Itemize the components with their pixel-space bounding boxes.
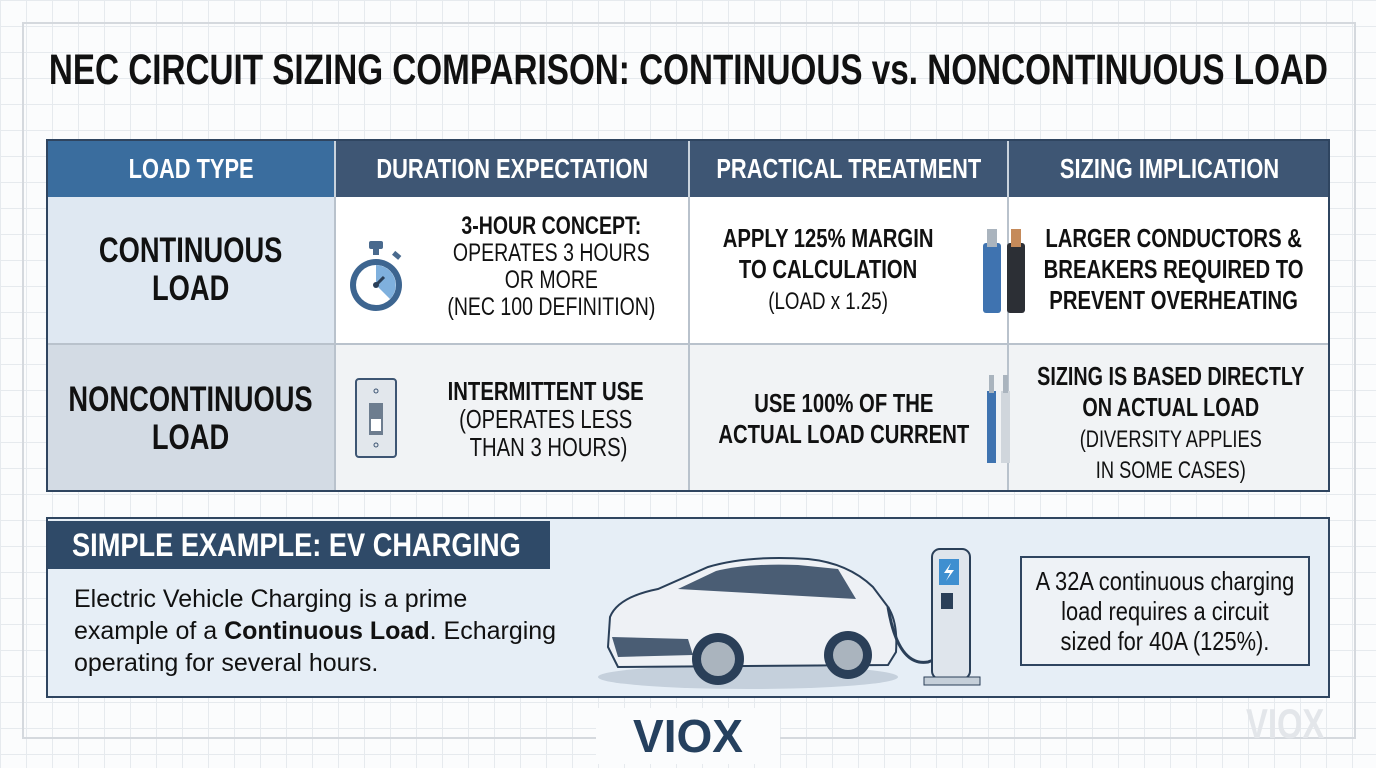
row 1 treatment: TO CALCULATION bbox=[739, 254, 918, 284]
callout: load requires a circuit bbox=[1061, 596, 1269, 626]
row 1 sizing: LARGER CONDUCTORS & bbox=[1046, 223, 1302, 253]
illustration: car and charger bbox=[598, 548, 980, 689]
row 2 label bbox=[48, 345, 336, 492]
header: practical treatment: PRACTICAL TREATMENT bbox=[716, 153, 981, 184]
header: practical treatment bbox=[690, 141, 1009, 197]
header: sizing implication: SIZING IMPLICATION bbox=[1060, 153, 1279, 184]
row 1 treatment: APPLY 125% MARGIN bbox=[723, 223, 934, 253]
row 1 treatment: (LOAD x 1.25) bbox=[769, 288, 888, 315]
panel: EV charging example bbox=[46, 517, 1330, 698]
row 1 sizing bbox=[1009, 197, 1330, 345]
example heading tab bbox=[48, 521, 550, 569]
row 1 duration: 3-HOUR CONCEPT: bbox=[461, 212, 641, 240]
row 1 label bbox=[48, 197, 336, 345]
logo: VIOX bbox=[596, 708, 780, 764]
header: load type: LOAD TYPE bbox=[129, 153, 253, 184]
row 2 label: LOAD bbox=[152, 418, 230, 456]
example heading tab: SIMPLE EXAMPLE: EV CHARGING bbox=[72, 527, 521, 563]
logo: VIOX: VIOX bbox=[633, 710, 743, 762]
row 1 label: CONTINUOUS bbox=[99, 231, 283, 270]
row 2 duration bbox=[336, 345, 690, 492]
callout: sized for 40A (125%). bbox=[1061, 626, 1269, 656]
row 2 sizing: (DIVERSITY APPLIES bbox=[1080, 426, 1262, 453]
row 1 duration: OR MORE bbox=[504, 266, 598, 294]
title: NEC CIRCUIT SIZING COMPARISON: CONTINUOUS vs. NONCONTINUOUS LOAD bbox=[48, 46, 1328, 94]
panel: comparison table bbox=[46, 139, 1330, 492]
example text: Electric Vehicle Charging is a prime bbox=[74, 585, 467, 613]
example text: example of a Continuous Load. Echarging bbox=[74, 617, 556, 645]
row 1 sizing: PREVENT OVERHEATING bbox=[1050, 285, 1298, 315]
row 1 treatment bbox=[690, 197, 1009, 345]
icon: light switch bbox=[355, 378, 397, 458]
example text bbox=[74, 585, 556, 677]
icon: thin conductors bbox=[987, 375, 1010, 463]
row 1 duration: OPERATES 3 HOURS bbox=[453, 239, 649, 267]
row 2 label: NONCONTINUOUS bbox=[69, 380, 313, 418]
icon: stopwatch bbox=[350, 241, 402, 311]
row 2 treatment bbox=[690, 345, 1009, 492]
watermark: VIOX bbox=[1246, 700, 1324, 747]
row 1 duration bbox=[336, 197, 690, 345]
header: sizing implication bbox=[1009, 141, 1330, 197]
row 2 duration: (OPERATES LESS bbox=[459, 404, 633, 434]
row 2 sizing: SIZING IS BASED DIRECTLY bbox=[1037, 361, 1305, 391]
row 1 duration: (NEC 100 DEFINITION) bbox=[447, 293, 655, 321]
example text: operating for several hours. bbox=[74, 649, 378, 677]
row 2 treatment: USE 100% OF THE bbox=[754, 388, 933, 418]
header: load type bbox=[48, 141, 336, 197]
row 2 duration: THAN 3 HOURS) bbox=[470, 432, 628, 462]
row 2 duration: INTERMITTENT USE bbox=[448, 376, 644, 406]
row 2 sizing: IN SOME CASES) bbox=[1096, 457, 1246, 484]
row 2 sizing: ON ACTUAL LOAD bbox=[1083, 392, 1259, 422]
row 2 sizing bbox=[1009, 345, 1330, 492]
icon: thick conductors bbox=[983, 229, 1025, 313]
callout: A 32A continuous charging bbox=[1036, 566, 1294, 596]
row 2 treatment: ACTUAL LOAD CURRENT bbox=[718, 418, 969, 448]
header: duration: DURATION EXPECTATION bbox=[376, 153, 648, 184]
row 1 label: LOAD bbox=[152, 269, 230, 308]
callout bbox=[1020, 556, 1310, 666]
header: duration bbox=[336, 141, 690, 197]
row 1 sizing: BREAKERS REQUIRED TO bbox=[1044, 254, 1304, 284]
